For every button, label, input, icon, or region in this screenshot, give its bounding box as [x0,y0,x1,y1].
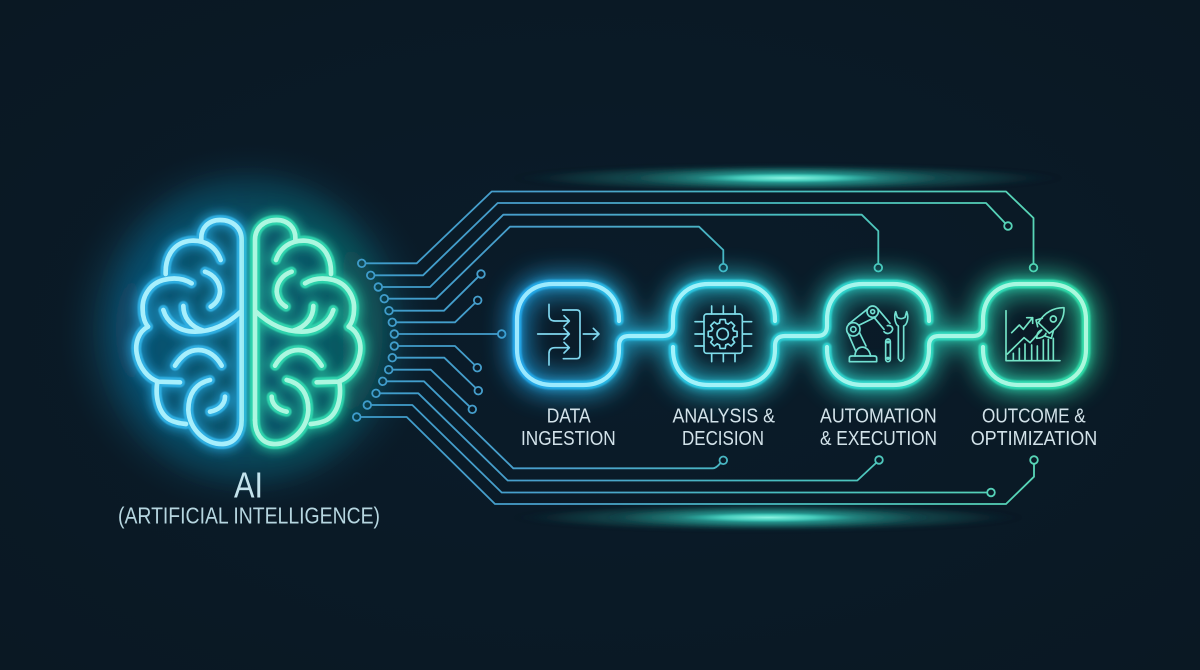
trace to analysis (top) [380,227,727,303]
short trace 5 [385,366,476,413]
icon: growth chart and rocket [1006,308,1064,361]
label: data ingestion: DATA [547,406,591,428]
short trace 2 [388,296,482,326]
pipeline neon boxes and connectors [517,284,1086,385]
AI title: AI [234,464,263,506]
label: automation and execution [820,406,937,450]
brain glow [53,140,443,520]
label: analysis and decision: DECISION [682,428,764,450]
label: automation and execution: & EXECUTION [820,428,937,450]
short trace 3 [390,342,481,372]
left hemisphere [136,220,242,444]
label: automation and execution: AUTOMATION [820,406,937,428]
trace to analysis (bottom) [379,378,727,468]
label: data ingestion: INGESTION [521,428,616,450]
circuit traces [353,192,1038,504]
icon: data ingestion arrows [538,304,599,365]
trace to bottom pin [364,401,995,496]
bottom light bar [513,504,1023,532]
label: outcome and optimization: OUTCOME & [982,406,1086,428]
trace to automation (top) [374,215,882,291]
trace to outcome (bottom) [353,413,1038,504]
short trace 4 [388,354,482,395]
trace to top pin [367,203,1012,279]
label: outcome and optimization [971,406,1097,450]
brain icon [136,220,360,444]
label: analysis and decision [672,406,776,450]
trace to outcome (top) [358,192,1037,272]
icon: chip with gear [695,306,752,362]
icon: robot arm and tools [847,306,908,362]
trace to automation (bottom) [372,390,883,480]
right hemisphere [255,220,360,444]
label: data ingestion [521,406,616,450]
straight trace to data ingestion [390,330,506,338]
label: analysis and decision: ANALYSIS & [672,406,776,428]
label: outcome and optimization: OPTIMIZATION [971,428,1097,450]
short trace 1 [385,270,485,315]
top light bar [513,164,1063,192]
AI subtitle: (ARTIFICIAL INTELLIGENCE) [118,502,380,528]
